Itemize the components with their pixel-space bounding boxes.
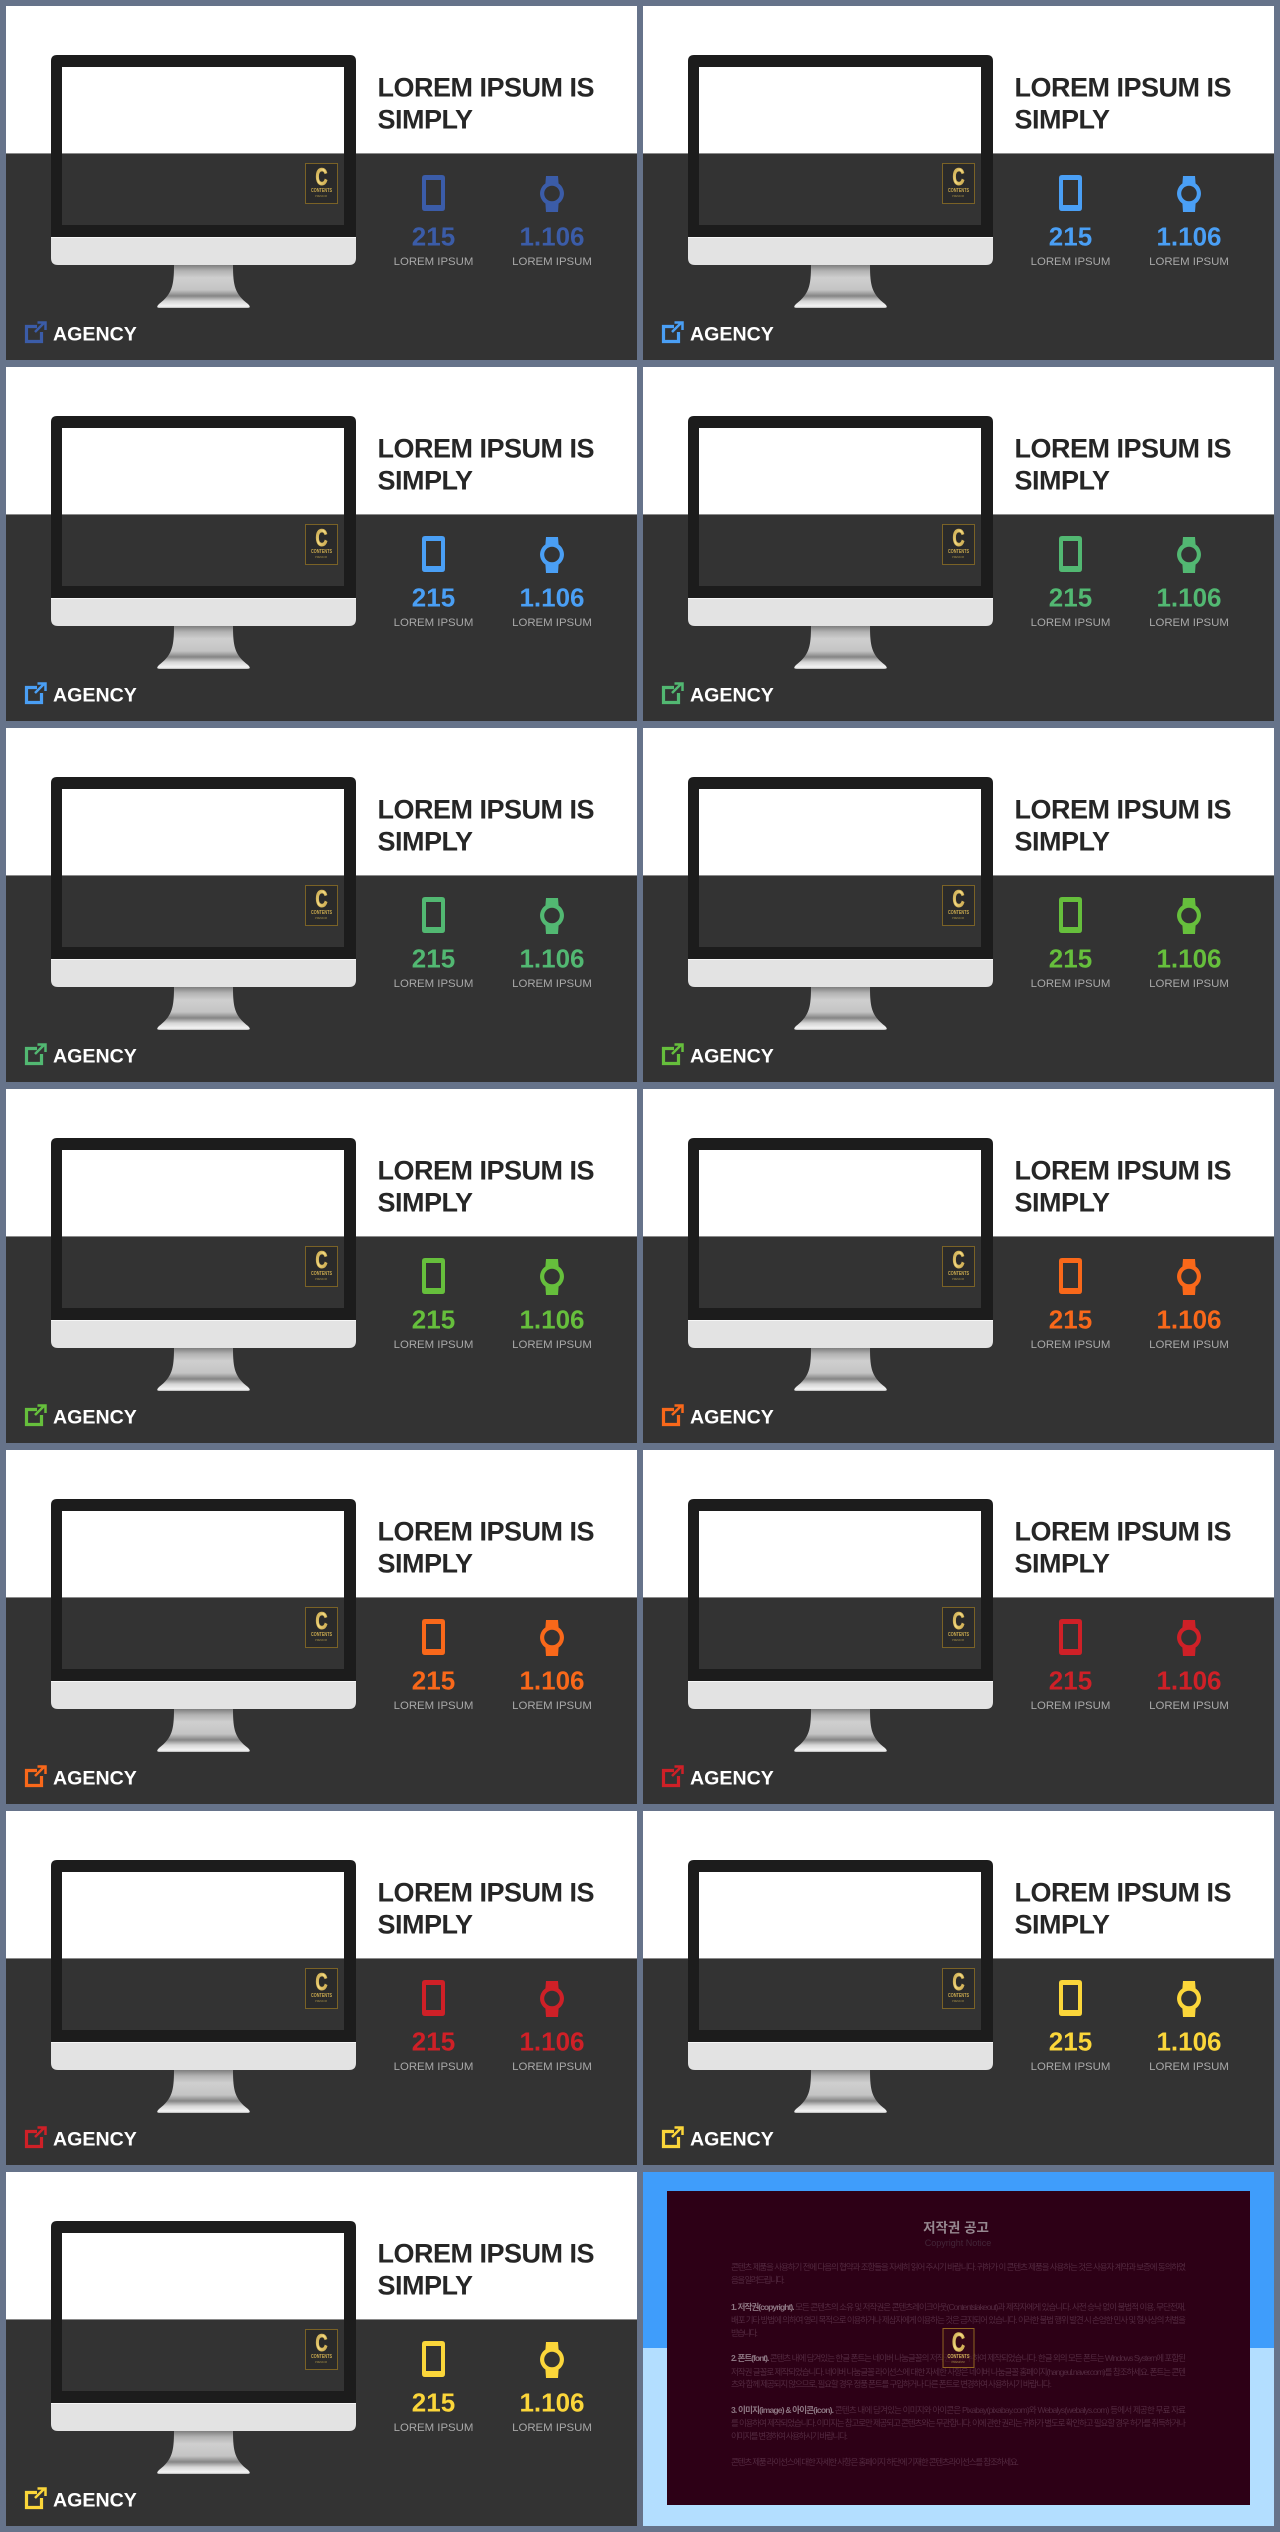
panel: slide 11 red bbox=[6, 1811, 637, 2165]
stat: 215: LOREM IPSUM bbox=[394, 1700, 473, 1712]
stat: 1.106 bbox=[512, 1666, 592, 1712]
logo badge bbox=[306, 164, 338, 204]
logo badge center bbox=[943, 2327, 974, 2368]
stat: 215 bbox=[394, 2027, 473, 2073]
logo badge: C bbox=[316, 886, 328, 913]
notice body text: 를 이용하여 제작되었습니다. 이미지는 참고로만 제공되고 콘텐츠와는 무관합니다. 이에 관한 권리는 귀하가 별도로 확인하고 필요할 경우 허가를 취득하거나 bbox=[731, 2418, 1186, 2428]
agency brand: AGENCY bbox=[53, 1046, 137, 1068]
heading: LOREM IPSUM IS bbox=[378, 73, 594, 103]
stat: 1.106: 1.106 bbox=[519, 944, 585, 974]
stat: 215: 215 bbox=[1049, 944, 1092, 974]
stat: 215: 215 bbox=[412, 2388, 455, 2418]
stat: 1.106 bbox=[512, 944, 592, 990]
icon: phone bbox=[1059, 1619, 1082, 1655]
stat: 1.106: LOREM IPSUM bbox=[512, 256, 592, 268]
panel: slide 2 blue bbox=[643, 6, 1274, 360]
logo badge: CONTENTS bbox=[948, 549, 970, 555]
heading: LOREM IPSUM IS bbox=[1014, 73, 1231, 103]
logo badge: C bbox=[952, 525, 964, 552]
logo badge: PREMIUM bbox=[315, 555, 327, 559]
panel: copyright notice bbox=[643, 2172, 1274, 2526]
logo badge: PREMIUM bbox=[952, 1999, 964, 2003]
stat: 215: LOREM IPSUM bbox=[1031, 256, 1110, 268]
agency brand: AGENCY bbox=[690, 1407, 774, 1429]
panel: slide 13 yellow bbox=[6, 2172, 637, 2526]
heading: SIMPLY bbox=[378, 465, 473, 495]
stat: 215: LOREM IPSUM bbox=[394, 2422, 473, 2434]
logo badge bbox=[306, 1246, 338, 1286]
icon: watch bbox=[1177, 176, 1201, 212]
stat: 215 bbox=[1031, 222, 1110, 268]
logo badge: C bbox=[316, 1608, 328, 1635]
monitor bbox=[51, 416, 356, 669]
stat: 1.106: 1.106 bbox=[519, 583, 585, 613]
stat: 215: 215 bbox=[1049, 583, 1092, 613]
logo badge: CONTENTS bbox=[948, 1993, 970, 1999]
icon: watch bbox=[1177, 537, 1201, 573]
panel: slide 10 red bbox=[643, 1450, 1274, 1804]
stat: 1.106: LOREM IPSUM bbox=[512, 2061, 592, 2073]
stat: 1.106 bbox=[1149, 2027, 1229, 2073]
stat: 215: LOREM IPSUM bbox=[1031, 2061, 1110, 2073]
notice subtitle: Copyright Notice bbox=[925, 2238, 991, 2248]
logo badge: PREMIUM bbox=[315, 2360, 327, 2364]
stat: 1.106: LOREM IPSUM bbox=[512, 1700, 592, 1712]
notice body text: 콘텐츠 제품 라이선스에 대한 자세한 사항은 홈페이지 하단에 기재한 콘텐츠라이선스를 참조하세요. bbox=[731, 2457, 1019, 2467]
logo badge: PREMIUM bbox=[952, 916, 964, 920]
agency brand: AGENCY bbox=[53, 2129, 137, 2151]
monitor bbox=[688, 1860, 993, 2113]
notice body text: 음을 알려드립니다. bbox=[731, 2275, 785, 2285]
monitor bbox=[51, 1860, 356, 2113]
heading: LOREM IPSUM IS bbox=[1014, 1156, 1231, 1186]
stat: 1.106: 1.106 bbox=[1156, 1305, 1222, 1335]
logo badge bbox=[942, 164, 974, 204]
logo badge: PREMIUM bbox=[952, 1277, 964, 1281]
monitor bbox=[51, 1499, 356, 1752]
stat: 1.106: 1.106 bbox=[1156, 2027, 1222, 2057]
heading: SIMPLY bbox=[1014, 1548, 1110, 1578]
agency brand: AGENCY bbox=[690, 324, 774, 346]
stat: 1.106: 1.106 bbox=[1156, 222, 1222, 252]
panel: slide 9 orange bbox=[6, 1450, 637, 1804]
logo badge: PREMIUM bbox=[315, 194, 327, 198]
icon: phone bbox=[422, 2341, 445, 2377]
heading: SIMPLY bbox=[1014, 465, 1110, 495]
stat: 215 bbox=[1031, 583, 1110, 629]
stat: 215: 215 bbox=[1049, 2027, 1092, 2057]
heading: SIMPLY bbox=[378, 826, 473, 856]
stat: 215: 215 bbox=[1049, 1666, 1092, 1696]
stat: 215 bbox=[1031, 1666, 1110, 1712]
notice body text: 츠와 함께 제공되지 않으므로, 필요할 경우 정품 폰트를 구입하거나 다른 폰트로 변경하여 사용하시기 바랍니다. bbox=[731, 2379, 1052, 2389]
icon: watch bbox=[540, 1259, 564, 1295]
icon: phone bbox=[422, 175, 445, 211]
logo badge: C bbox=[952, 164, 964, 191]
icon: phone bbox=[1059, 536, 1082, 572]
icon: watch bbox=[1177, 898, 1201, 934]
stat: 215: LOREM IPSUM bbox=[394, 617, 473, 629]
heading: SIMPLY bbox=[1014, 104, 1110, 134]
stat: 1.106: 1.106 bbox=[519, 2388, 585, 2418]
stat: 215: LOREM IPSUM bbox=[1031, 1339, 1110, 1351]
logo badge: CONTENTS bbox=[311, 1271, 333, 1277]
logo badge: CONTENTS bbox=[311, 910, 333, 916]
stat: 215: 215 bbox=[412, 1666, 455, 1696]
monitor bbox=[688, 777, 993, 1030]
stat: 1.106: LOREM IPSUM bbox=[512, 617, 592, 629]
stat: 215: LOREM IPSUM bbox=[394, 256, 473, 268]
heading: SIMPLY bbox=[378, 2270, 473, 2300]
stat: 215: LOREM IPSUM bbox=[394, 2061, 473, 2073]
panel: slide 1 navy bbox=[6, 6, 637, 360]
heading: LOREM IPSUM IS bbox=[1014, 795, 1231, 825]
notice body text: 받습니다. bbox=[731, 2328, 758, 2338]
panel: slide 8 orange bbox=[643, 1089, 1274, 1443]
stat: 215: 215 bbox=[412, 583, 455, 613]
panel: slide 6 lime bbox=[643, 728, 1274, 1082]
notice body text: 콘텐츠 제품을 사용하기 전에 다음의 협약과 조항들을 자세히 읽어 주시기 바랍니다. 귀하가 이 콘텐츠 제품을 사용하는 것은 사용자 계약과 보증에 동의하였 bbox=[731, 2262, 1186, 2272]
stat: 215: LOREM IPSUM bbox=[1031, 617, 1110, 629]
logo badge: PREMIUM bbox=[952, 555, 964, 559]
stat: 215: LOREM IPSUM bbox=[1031, 1700, 1110, 1712]
notice body text bbox=[731, 2262, 1186, 2467]
stat: 1.106: 1.106 bbox=[519, 2027, 585, 2057]
icon: phone bbox=[1059, 175, 1082, 211]
icon: phone bbox=[422, 536, 445, 572]
stat: 215: 215 bbox=[412, 222, 455, 252]
agency brand: AGENCY bbox=[53, 324, 137, 346]
notice body text: 3. 이미지(image) & 아이콘(icon). 콘텐츠 내에 담겨있는 이미지와 아이콘은 Pixabay(pixabay.com)와 Webalys(webalys.com) 등에서 제공한 무료 자료 bbox=[731, 2405, 1186, 2415]
stat: 1.106: LOREM IPSUM bbox=[1149, 978, 1229, 990]
logo badge: CONTENTS bbox=[948, 188, 970, 194]
stat: 1.106 bbox=[512, 2388, 592, 2434]
monitor bbox=[51, 2221, 356, 2474]
monitor bbox=[688, 1138, 993, 1391]
heading: LOREM IPSUM IS bbox=[378, 1878, 594, 1908]
icon: watch bbox=[1177, 1620, 1201, 1656]
stat: 215 bbox=[394, 583, 473, 629]
stat: 215 bbox=[1031, 944, 1110, 990]
stat: 1.106 bbox=[512, 222, 592, 268]
stat: 215: 215 bbox=[412, 1305, 455, 1335]
icon: watch bbox=[540, 898, 564, 934]
logo badge center: PREMIUM bbox=[952, 2360, 965, 2364]
stat: 1.106 bbox=[1149, 1305, 1229, 1351]
notice title: 저작권 공고 bbox=[923, 2220, 989, 2236]
notice body text: 1. 저작권(copyright). 모든 콘텐츠의 소유 및 저작권은 콘텐츠레이크아웃(Contentslakeout)과 제작자에게 있습니다. 사전 승낙 없이 불법적 이용, 무단전재, bbox=[731, 2302, 1186, 2312]
logo badge: C bbox=[952, 1969, 964, 1996]
stat: 215 bbox=[394, 2388, 473, 2434]
stat: 215: LOREM IPSUM bbox=[394, 978, 473, 990]
stat: 1.106 bbox=[512, 583, 592, 629]
logo badge bbox=[942, 1968, 974, 2008]
stat: 1.106 bbox=[512, 1305, 592, 1351]
stat: 1.106 bbox=[512, 2027, 592, 2073]
heading: SIMPLY bbox=[378, 104, 473, 134]
stat: 215: 215 bbox=[412, 2027, 455, 2057]
icon: phone bbox=[422, 897, 445, 933]
agency brand: AGENCY bbox=[53, 685, 137, 707]
panel: slide 5 green bbox=[6, 728, 637, 1082]
heading: SIMPLY bbox=[1014, 1187, 1110, 1217]
heading: LOREM IPSUM IS bbox=[378, 2239, 594, 2269]
stat: 215: 215 bbox=[412, 944, 455, 974]
icon: phone bbox=[422, 1619, 445, 1655]
stat: 1.106: 1.106 bbox=[519, 1305, 585, 1335]
notice body text: 저작권 글꼴로 제작되었습니다. 네이버 나눔글꼴 라이선스에 대한 자세한 사항은 네이버 나눔글꼴 홈페이지(hangeul.naver.com)를 참조하세요. 폰트는 콘텐 bbox=[731, 2367, 1186, 2377]
panel: slide 12 yellow bbox=[643, 1811, 1274, 2165]
monitor bbox=[688, 416, 993, 669]
logo badge: C bbox=[316, 1247, 328, 1274]
stat: 215: LOREM IPSUM bbox=[394, 1339, 473, 1351]
panel: slide 4 green bbox=[643, 367, 1274, 721]
stat: 1.106: LOREM IPSUM bbox=[1149, 2061, 1229, 2073]
logo badge: C bbox=[952, 1608, 964, 1635]
icon: phone bbox=[422, 1258, 445, 1294]
heading: LOREM IPSUM IS bbox=[1014, 1517, 1231, 1547]
stat: 1.106: LOREM IPSUM bbox=[512, 2422, 592, 2434]
monitor bbox=[51, 1138, 356, 1391]
notice card bbox=[667, 2191, 1250, 2505]
icon: watch bbox=[540, 176, 564, 212]
stat: 1.106: LOREM IPSUM bbox=[1149, 617, 1229, 629]
stat: 215: 215 bbox=[1049, 1305, 1092, 1335]
heading: LOREM IPSUM IS bbox=[1014, 434, 1231, 464]
logo badge center: CONTENTS bbox=[948, 2354, 970, 2360]
logo badge center: C bbox=[952, 2327, 965, 2357]
logo badge bbox=[306, 1968, 338, 2008]
stat: 215 bbox=[1031, 1305, 1110, 1351]
logo badge bbox=[942, 886, 974, 926]
stat: 215: LOREM IPSUM bbox=[1031, 978, 1110, 990]
logo badge: C bbox=[316, 525, 328, 552]
monitor bbox=[51, 55, 356, 308]
logo badge: CONTENTS bbox=[311, 1993, 333, 1999]
agency brand: AGENCY bbox=[53, 1407, 137, 1429]
agency brand: AGENCY bbox=[690, 685, 774, 707]
icon: watch bbox=[540, 1620, 564, 1656]
logo badge: PREMIUM bbox=[952, 1638, 964, 1642]
stat: 215 bbox=[394, 1666, 473, 1712]
stat: 215 bbox=[394, 1305, 473, 1351]
monitor bbox=[688, 55, 993, 308]
icon: watch bbox=[540, 2342, 564, 2378]
icon: watch bbox=[1177, 1259, 1201, 1295]
icon: watch bbox=[540, 537, 564, 573]
agency brand: AGENCY bbox=[690, 1768, 774, 1790]
logo badge: PREMIUM bbox=[952, 194, 964, 198]
logo badge: C bbox=[952, 1247, 964, 1274]
stat: 1.106: 1.106 bbox=[1156, 583, 1222, 613]
logo badge bbox=[306, 1608, 338, 1648]
heading: SIMPLY bbox=[378, 1548, 473, 1578]
stat: 1.106: LOREM IPSUM bbox=[1149, 1339, 1229, 1351]
stat: 1.106: LOREM IPSUM bbox=[512, 1339, 592, 1351]
heading: LOREM IPSUM IS bbox=[378, 1517, 594, 1547]
stat: 215 bbox=[394, 944, 473, 990]
stat: 1.106: LOREM IPSUM bbox=[1149, 256, 1229, 268]
notice body text: 2. 폰트(font). 콘텐츠 내에 담겨있는 한글 폰트는 네이버 나눔글꼴의 저작권을 준수하여 제작되었습니다. 한글 외의 모든 폰트는 Windows System에 포함된 bbox=[731, 2353, 1186, 2363]
heading: SIMPLY bbox=[1014, 1909, 1110, 1939]
heading: LOREM IPSUM IS bbox=[378, 795, 594, 825]
notice body text: 이미지를 변경하여 사용하시기 바랍니다. bbox=[731, 2431, 848, 2441]
icon: phone bbox=[422, 1980, 445, 2016]
logo badge: PREMIUM bbox=[315, 916, 327, 920]
logo badge: C bbox=[316, 164, 328, 191]
logo badge: CONTENTS bbox=[948, 1632, 970, 1638]
stat: 1.106: LOREM IPSUM bbox=[1149, 1700, 1229, 1712]
stat: 1.106: 1.106 bbox=[1156, 1666, 1222, 1696]
logo badge bbox=[306, 524, 338, 564]
logo badge bbox=[306, 2330, 338, 2370]
panel: slide 7 lime bbox=[6, 1089, 637, 1443]
logo badge: CONTENTS bbox=[311, 1632, 333, 1638]
logo badge: CONTENTS bbox=[948, 910, 970, 916]
icon: phone bbox=[1059, 1980, 1082, 2016]
logo badge bbox=[942, 1608, 974, 1648]
stat: 215 bbox=[394, 222, 473, 268]
logo badge: CONTENTS bbox=[311, 549, 333, 555]
logo badge bbox=[942, 1246, 974, 1286]
logo badge: C bbox=[316, 1969, 328, 1996]
stat: 215 bbox=[1031, 2027, 1110, 2073]
agency brand: AGENCY bbox=[53, 2490, 137, 2512]
stat: 1.106: 1.106 bbox=[519, 222, 585, 252]
agency brand: AGENCY bbox=[690, 1046, 774, 1068]
monitor bbox=[51, 777, 356, 1030]
logo badge: CONTENTS bbox=[948, 1271, 970, 1277]
heading: LOREM IPSUM IS bbox=[1014, 1878, 1231, 1908]
panel: slide 3 blue bbox=[6, 367, 637, 721]
stat: 1.106: LOREM IPSUM bbox=[512, 978, 592, 990]
icon: watch bbox=[1177, 1981, 1201, 2017]
heading: LOREM IPSUM IS bbox=[378, 434, 594, 464]
icon: watch bbox=[540, 1981, 564, 2017]
stat: 1.106 bbox=[1149, 583, 1229, 629]
logo badge bbox=[306, 886, 338, 926]
agency brand: AGENCY bbox=[53, 1768, 137, 1790]
stat: 1.106 bbox=[1149, 944, 1229, 990]
stat: 1.106 bbox=[1149, 1666, 1229, 1712]
logo badge: PREMIUM bbox=[315, 1277, 327, 1281]
logo badge: PREMIUM bbox=[315, 1638, 327, 1642]
stat: 1.106: 1.106 bbox=[519, 1666, 585, 1696]
logo badge bbox=[942, 524, 974, 564]
stat: 215: 215 bbox=[1049, 222, 1092, 252]
notice body text: 배포 기타 방법에 의하여 영리 목적으로 이용하거나 제삼자에게 이용하는 것은 금지되어 있습니다. 이러한 불법 행위 발견 시 손엄한 민사 및 형사상의 처벌을 bbox=[731, 2315, 1186, 2325]
icon: phone bbox=[1059, 1258, 1082, 1294]
stat: 1.106: 1.106 bbox=[1156, 944, 1222, 974]
logo badge: CONTENTS bbox=[311, 188, 333, 194]
logo badge: C bbox=[952, 886, 964, 913]
monitor bbox=[688, 1499, 993, 1752]
agency brand: AGENCY bbox=[690, 2129, 774, 2151]
stat: 1.106 bbox=[1149, 222, 1229, 268]
heading: SIMPLY bbox=[378, 1909, 473, 1939]
logo badge: PREMIUM bbox=[315, 1999, 327, 2003]
heading: SIMPLY bbox=[1014, 826, 1110, 856]
logo badge: CONTENTS bbox=[311, 2354, 333, 2360]
icon: phone bbox=[1059, 897, 1082, 933]
heading: SIMPLY bbox=[378, 1187, 473, 1217]
heading: LOREM IPSUM IS bbox=[378, 1156, 594, 1186]
logo badge: C bbox=[316, 2330, 328, 2357]
